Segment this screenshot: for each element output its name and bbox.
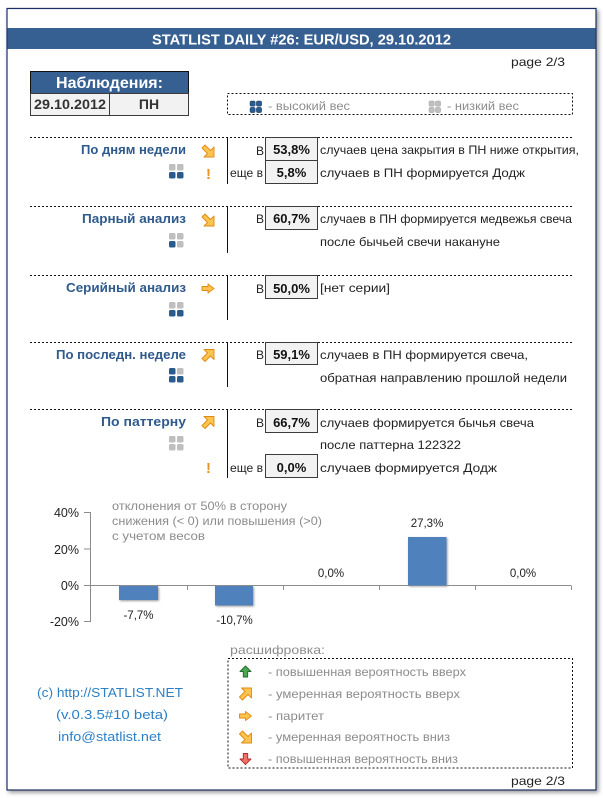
contacts: (v.0.3.5#10 beta) [56, 707, 168, 722]
chart note: снижения (< 0) или повышения (>0) [112, 514, 322, 528]
bar chart: 0% [61, 579, 79, 593]
observations table: 29.10.2012 [34, 96, 106, 112]
section: by pattern: случаев формируется Додж [320, 461, 497, 475]
icon: weight [169, 436, 184, 450]
section: by pattern [30, 410, 573, 478]
legend caption: расшифровка: [230, 643, 325, 657]
weight legend: - низкий вес [447, 99, 519, 113]
chart note [112, 499, 322, 543]
arrow: strong down [240, 754, 251, 764]
section: pair analysis: после бычьей свечи накануне [320, 235, 500, 249]
contacts: info@statlist.net [58, 729, 161, 744]
section: series analysis: [нет серии] [320, 281, 390, 295]
section: by pattern: еще в [230, 461, 263, 475]
icon: weight [169, 368, 184, 382]
section: pair analysis [30, 206, 573, 253]
bar chart: 40% [54, 506, 79, 520]
icon: high weight [250, 101, 262, 113]
section: series analysis [30, 276, 573, 320]
section: by weekday: 5,8% [277, 165, 307, 180]
section: series analysis: Серийный анализ [66, 280, 187, 295]
observations table [30, 72, 188, 116]
contacts [37, 685, 183, 744]
weight legend: - высокий вес [268, 99, 350, 113]
section: by pattern: 66,7% [273, 415, 310, 430]
bar chart: 27,3% [411, 518, 443, 530]
section: last week: По последн. неделе [56, 347, 186, 362]
page number top: page 2/3 [511, 55, 565, 69]
arrow: moderate up [202, 350, 214, 362]
arrow: moderate up [202, 416, 214, 428]
arrow: moderate up [240, 688, 252, 700]
section: by weekday: В [256, 144, 264, 158]
arrow: parity [202, 284, 214, 293]
bar chart: 20% [54, 543, 79, 557]
chart note: с учетом весов [112, 529, 205, 543]
section: last week: В [256, 348, 264, 362]
icon: weight [169, 164, 184, 178]
section: last week: обратная направлению прошлой недели [320, 371, 567, 385]
icon: weight [169, 233, 184, 248]
title banner: STATLIST DAILY #26: EUR/USD, 29.10.2012 [152, 32, 451, 48]
section: by weekday: случаев в ПН формируется Додж [320, 166, 525, 180]
arrows legend: - умеренная вероятность вниз [268, 730, 451, 744]
section: last week: 59,1% [273, 347, 310, 362]
section: by weekday: По дням недели [81, 142, 186, 157]
section: last week: случаев в ПН формируется свеча, [320, 348, 528, 362]
arrows legend: - повышенная вероятность вниз [268, 752, 459, 766]
section: pair analysis: случаев в ПН формируется медвежья свеча [320, 212, 572, 226]
arrow: parity [240, 712, 252, 720]
arrows legend: - паритет [268, 709, 325, 723]
section: pair analysis: Парный анализ [82, 211, 187, 226]
section: by pattern: В [256, 416, 264, 430]
observations table: Наблюдения: [56, 75, 163, 92]
section: by weekday: случаев цена закрытия в ПН ниже открытия, [320, 143, 579, 157]
section: by pattern: По паттерну [101, 414, 187, 429]
bar chart [50, 499, 572, 629]
arrows legend [228, 658, 572, 768]
bar chart: -7,7% [123, 610, 154, 622]
arrow: moderate down [240, 731, 252, 743]
observations table: ПН [139, 96, 159, 112]
section: by pattern: после паттерна 122322 [320, 438, 461, 452]
icon: exclamation: ! [206, 166, 211, 183]
bar chart: 0,0% [318, 568, 344, 580]
arrows legend: - повышенная вероятность вверх [268, 665, 466, 679]
section: by pattern: случаев формируется бычья свеча [320, 416, 534, 430]
bar chart: -10,7% [216, 615, 253, 627]
contacts: (c) http://STATLIST.NET [37, 685, 183, 700]
icon: exclamation: ! [206, 460, 211, 477]
section: by weekday: еще в [230, 166, 263, 180]
section: pair analysis: В [256, 212, 264, 226]
page number bottom: page 2/3 [511, 774, 565, 788]
section: last week [30, 342, 573, 387]
weight legend [228, 94, 572, 114]
section: by pattern: 0,0% [277, 460, 307, 475]
section: by weekday [30, 138, 579, 184]
section: series analysis: 50,0% [273, 281, 310, 296]
chart note: отклонения от 50% в сторону [112, 499, 287, 513]
bar chart: 0,0% [510, 568, 536, 580]
section: pair analysis: 60,7% [273, 211, 310, 226]
arrow: moderate down [202, 214, 214, 226]
section: by weekday: 53,8% [273, 142, 310, 157]
section: series analysis: В [256, 282, 264, 296]
arrow: moderate down [202, 145, 214, 157]
arrows legend: - умеренная вероятность вверх [268, 687, 460, 701]
arrow: strong up [240, 666, 251, 677]
icon: low weight [429, 101, 441, 113]
bar chart: -20% [50, 615, 79, 629]
icon: weight [169, 302, 184, 316]
title banner [8, 28, 596, 49]
